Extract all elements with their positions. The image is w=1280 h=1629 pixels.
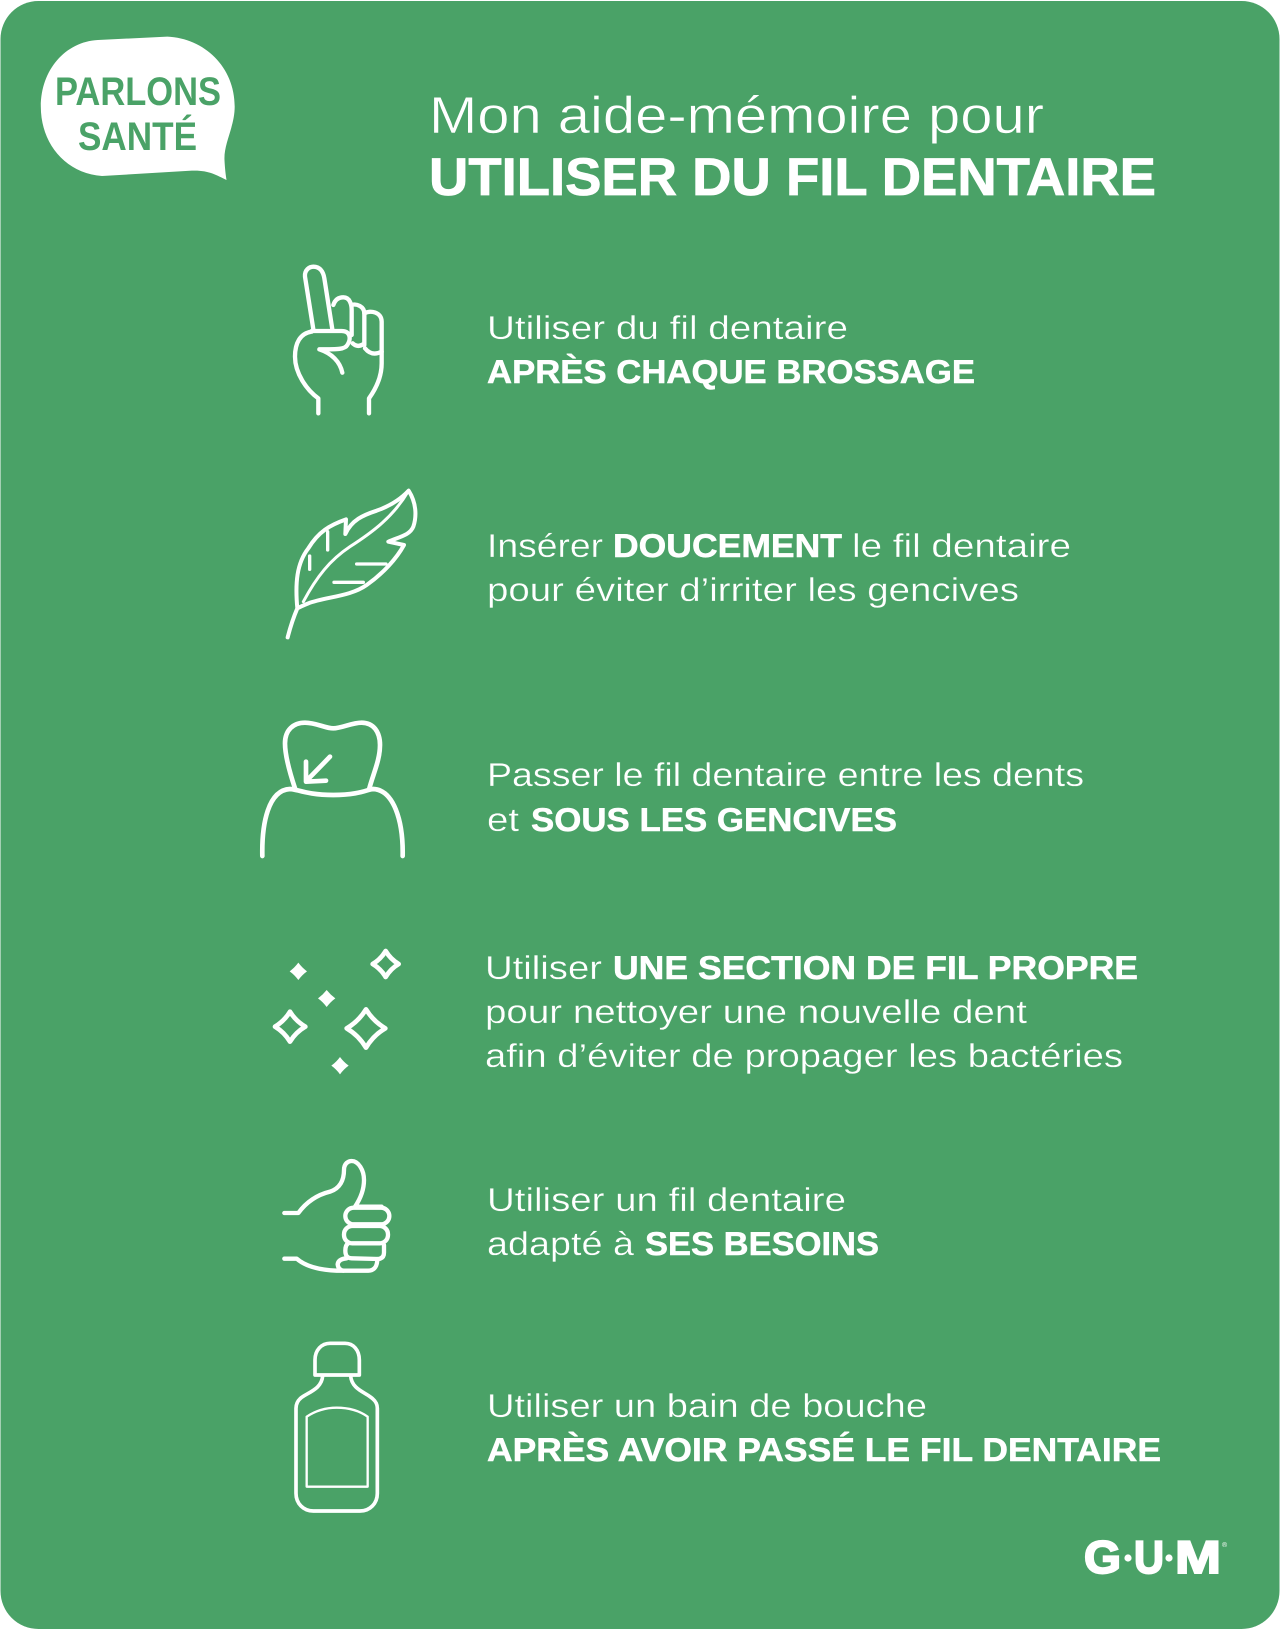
text: step 5: Utiliser un fil dentaire: [487, 1181, 846, 1218]
text: step 4: Utiliser: [485, 949, 602, 986]
text: step 5: [487, 1181, 879, 1262]
logo: GUM: ®: [1222, 1542, 1228, 1549]
badge text: [55, 70, 221, 159]
icon: raised finger hand: [295, 267, 382, 413]
text: step 1: [487, 309, 975, 390]
title: [429, 87, 1156, 207]
text: step 4: afin d’éviter de propager les bactéries: [485, 1037, 1123, 1074]
text: step 5: SES BESOINS: [645, 1225, 879, 1262]
text: step 2: le fil dentaire: [852, 527, 1071, 564]
logo: GUM: G: [1084, 1531, 1121, 1583]
bubble shape: [41, 37, 235, 180]
text: step 3: SOUS LES GENCIVES: [531, 801, 897, 838]
text: step 4: UNE SECTION DE FIL PROPRE: [613, 949, 1138, 986]
text: step 2: [487, 527, 1071, 608]
icon: tooth and gum with arrow: [262, 723, 403, 856]
text: step 4: [485, 949, 1138, 1074]
text: step 2: pour éviter d’irriter les gencives: [487, 571, 1019, 608]
title: Mon aide-mémoire pour: [429, 87, 1044, 145]
text: step 5: adapté à: [487, 1225, 635, 1262]
text: step 6: APRÈS AVOIR PASSÉ LE FIL DENTAIRE: [487, 1431, 1161, 1468]
text: step 1: Utiliser du fil dentaire: [487, 309, 848, 346]
badge text: SANTÉ: [78, 114, 197, 159]
logo: GUM: M: [1175, 1531, 1221, 1583]
text: step 3: [487, 756, 1084, 838]
icon: mouthwash bottle: [296, 1343, 377, 1511]
logo: GUM: U: [1134, 1531, 1164, 1583]
logo: GUM: [1084, 1531, 1228, 1583]
text: step 2: Insérer: [487, 527, 603, 564]
text: step 2: DOUCEMENT: [613, 527, 842, 564]
text: step 3: Passer le fil dentaire entre les dents: [487, 756, 1084, 793]
icon: thumbs up: [284, 1161, 389, 1271]
text: step 6: [487, 1387, 1161, 1468]
text: step 6: Utiliser un bain de bouche: [487, 1387, 927, 1424]
text: step 3: et: [487, 801, 519, 838]
icon: sparkles: [275, 951, 399, 1074]
title: UTILISER DU FIL DENTAIRE: [429, 148, 1156, 207]
badge text: PARLONS: [55, 70, 221, 114]
text: step 4: pour nettoyer une nouvelle dent: [485, 993, 1027, 1030]
text: step 1: APRÈS CHAQUE BROSSAGE: [487, 353, 975, 390]
icon: feather: [288, 491, 415, 637]
badge: Parlons santé speech bubble: [41, 37, 235, 180]
